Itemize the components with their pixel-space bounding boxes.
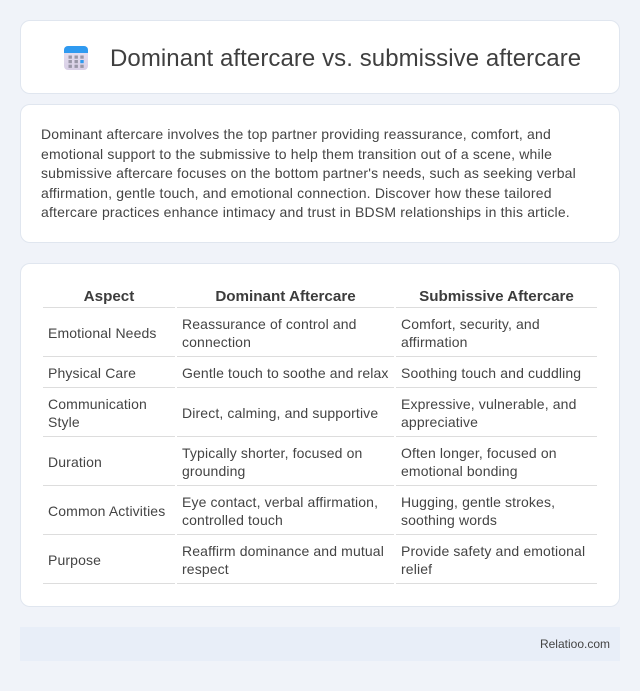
row: Purpose: Purpose (48, 552, 101, 568)
table header: Dominant Aftercare (215, 288, 356, 305)
panel: comparison table (20, 263, 620, 607)
row: Communication Style: Style (48, 414, 80, 430)
row: Duration: Duration (48, 454, 102, 470)
footer credit: Relatioo.com (540, 637, 610, 651)
table header (43, 288, 597, 308)
table header: Submissive Aftercare (419, 288, 574, 305)
row: Communication Style: Communication (48, 396, 147, 412)
row: Communication Style: appreciative (401, 414, 478, 430)
row: Duration: Typically shorter, focused on (182, 445, 362, 461)
row: Common Activities: controlled touch (182, 512, 283, 528)
row: Duration: emotional bonding (401, 463, 518, 479)
row: Physical Care: Gentle touch to soothe and relax (182, 365, 389, 381)
icon: calendar (64, 46, 88, 70)
intro text: affirmation, gentle touch, and emotional connection. Discover how these tailored (41, 185, 552, 201)
row: Duration: grounding (182, 463, 245, 479)
row: Purpose: Provide safety and emotional (401, 543, 585, 559)
row: Common Activities (43, 494, 597, 535)
row: Purpose: Reaffirm dominance and mutual (182, 543, 384, 559)
row: Common Activities: soothing words (401, 512, 497, 528)
row: Physical Care (43, 365, 597, 388)
row: Duration: Often longer, focused on (401, 445, 557, 461)
row: Purpose (43, 543, 597, 584)
panel: intro (20, 104, 620, 243)
intro text: emotional support to the submissive to help them transition out of a scene, while (41, 146, 552, 162)
row: Communication Style: Expressive, vulnerable, and (401, 396, 576, 412)
row: Purpose: relief (401, 561, 432, 577)
row: Communication Style (43, 396, 597, 437)
intro text: submissive aftercare focuses on the bottom partner's needs, such as seeking verbal (41, 165, 576, 181)
intro text: Dominant aftercare involves the top partner providing reassurance, comfort, and (41, 126, 551, 142)
row: Purpose: respect (182, 561, 229, 577)
row: Duration (43, 445, 597, 486)
panel: title card (20, 20, 620, 94)
table header: Aspect (84, 288, 134, 305)
row: Physical Care: Physical Care (48, 365, 136, 381)
row: Common Activities: Hugging, gentle strokes, (401, 494, 555, 510)
row: Physical Care: Soothing touch and cuddling (401, 365, 581, 381)
intro text: aftercare practices enhance intimacy and trust in BDSM relationships in this article. (41, 204, 570, 220)
row: Common Activities: Common Activities (48, 503, 165, 519)
title: Dominant aftercare vs. submissive aftercare (110, 45, 581, 72)
footer bar (20, 627, 620, 661)
row: Emotional Needs: Comfort, security, and (401, 316, 540, 332)
row: Communication Style: Direct, calming, and supportive (182, 405, 378, 421)
row: Emotional Needs: affirmation (401, 334, 468, 350)
intro text (41, 126, 576, 220)
row: Common Activities: Eye contact, verbal affirmation, (182, 494, 378, 510)
row: Emotional Needs: Reassurance of control and (182, 316, 357, 332)
row: Emotional Needs (43, 316, 597, 357)
row: Emotional Needs: connection (182, 334, 251, 350)
row: Emotional Needs: Emotional Needs (48, 325, 157, 341)
